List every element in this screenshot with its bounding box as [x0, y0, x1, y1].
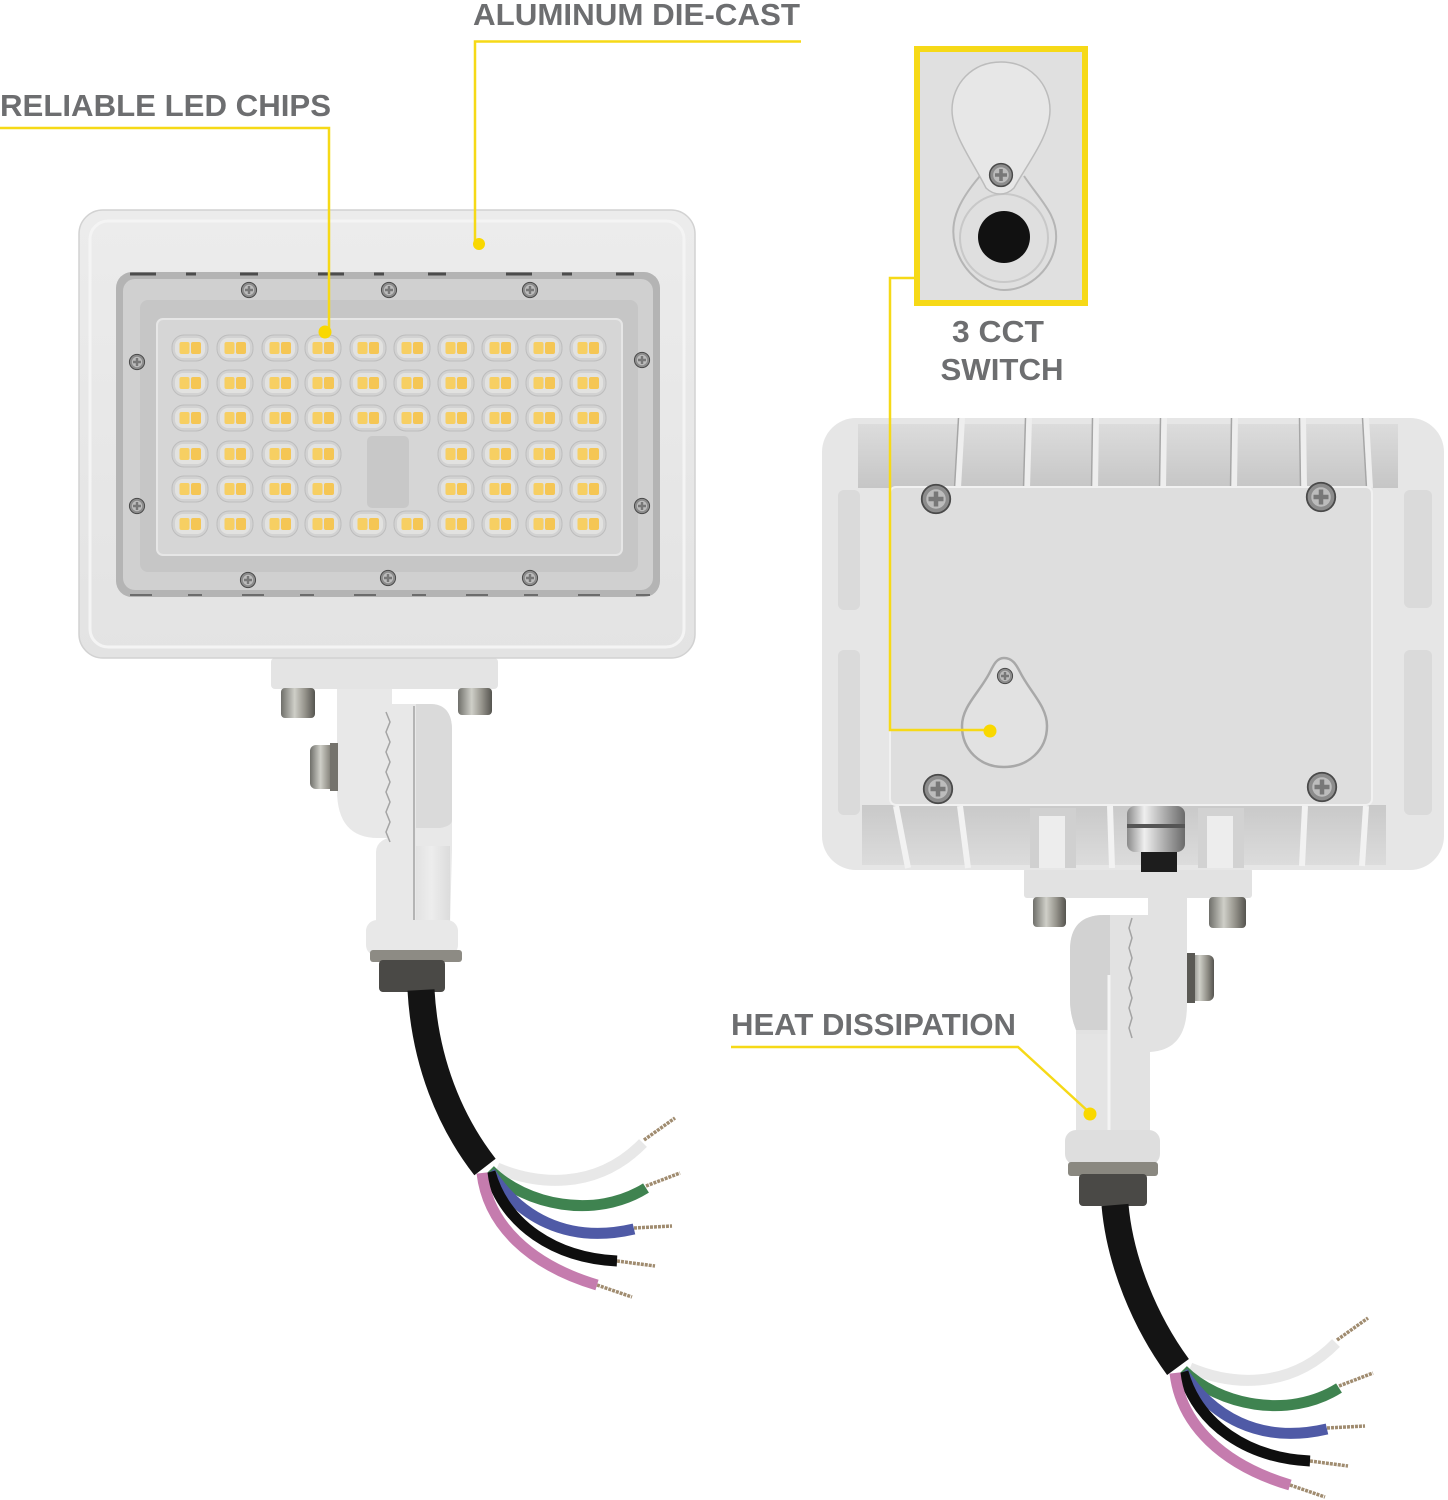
LED chip grid	[172, 335, 606, 537]
pink wire	[482, 1173, 597, 1285]
bare wire tips	[597, 1118, 680, 1297]
front mounting arm	[337, 686, 462, 992]
rear green wire	[1183, 1370, 1339, 1406]
rear switch cover	[962, 658, 1047, 767]
green wire	[490, 1170, 646, 1206]
rear cover plate	[890, 487, 1372, 805]
rear black wire	[1183, 1372, 1310, 1461]
black switch knob	[978, 211, 1030, 263]
rear housing with heat-sink fins	[822, 418, 1444, 870]
inset: 3 CCT switch	[917, 49, 1085, 303]
wire bundle	[482, 1118, 680, 1297]
white wire	[497, 1143, 643, 1180]
rear pink wire	[1175, 1373, 1290, 1485]
pivoted cover	[952, 62, 1050, 194]
front housing	[79, 210, 695, 658]
switch port rings	[953, 176, 1056, 290]
heading: reliable LED chips: RELIABLE LED CHIPS	[0, 88, 331, 123]
rear black cable	[1115, 1205, 1178, 1367]
front side bolt	[310, 743, 338, 791]
rear flood light fixture	[822, 418, 1444, 1497]
heading: 3 CCT switch	[940, 314, 1064, 387]
rear blue wire	[1183, 1372, 1327, 1433]
callout: aluminum die-cast leader	[473, 42, 801, 250]
rear wire bundle	[1175, 1318, 1373, 1497]
heading: 3 CCT switch: SWITCH	[940, 352, 1064, 387]
front black cable	[421, 990, 485, 1167]
rear side bolt	[1187, 953, 1214, 1003]
sensor window	[367, 436, 409, 508]
callout: heat dissipation leader	[731, 1047, 1096, 1120]
front flood light fixture	[79, 210, 695, 1297]
rear cover screws	[922, 483, 1336, 803]
rear white wire	[1190, 1343, 1336, 1380]
black wire	[490, 1172, 617, 1261]
blue wire	[490, 1172, 634, 1233]
front bezel screws	[129, 282, 650, 588]
front mounting bracket	[271, 658, 498, 689]
front recessed bezel	[116, 272, 660, 597]
heading: 3 CCT switch: 3 CCT	[952, 314, 1044, 349]
cable gland	[1127, 806, 1185, 872]
front bracket bolts	[281, 688, 492, 718]
rear bracket bolts	[1033, 897, 1246, 928]
cover screw	[990, 164, 1012, 186]
callout: 3 CCT switch leader	[890, 278, 996, 738]
rear mounting arm	[1065, 895, 1187, 1206]
rear bare wire tips	[1290, 1318, 1373, 1497]
heading: heat dissipation: HEAT DISSIPATION	[731, 1007, 1016, 1042]
callout: reliable LED chips leader	[0, 128, 332, 338]
rear mounting bracket	[1024, 868, 1252, 898]
LED board	[157, 319, 622, 555]
rear bracket pillars	[1030, 808, 1244, 868]
